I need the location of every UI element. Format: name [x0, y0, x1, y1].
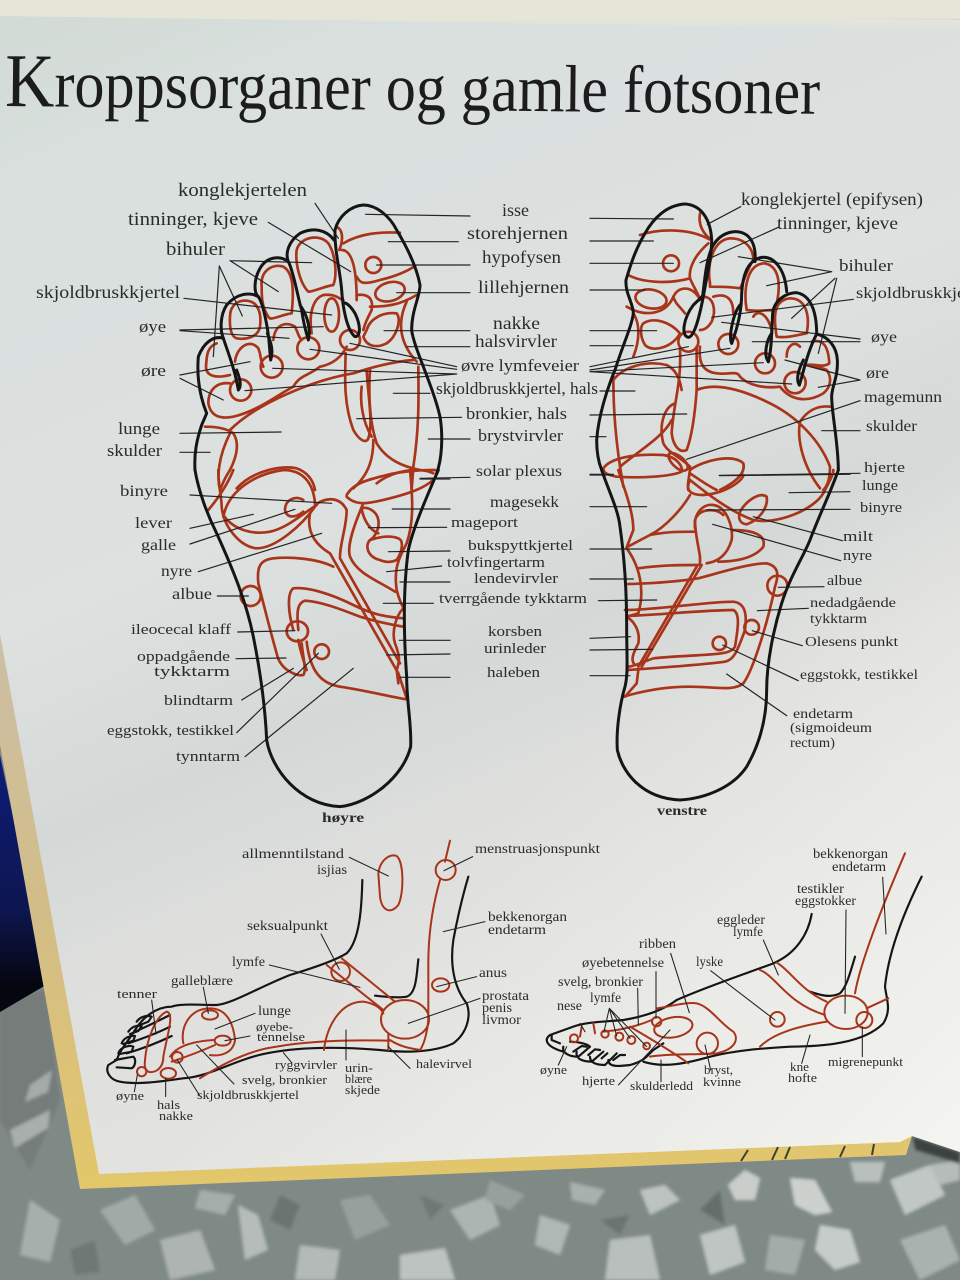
- labels: centre column: isse: [502, 200, 529, 220]
- labels: left column: binyre: [120, 483, 168, 500]
- labels: inner side of foot: tennelse: [257, 1029, 305, 1044]
- labels: centre column: solar plexus: [476, 463, 562, 480]
- labels: left column: blindtarm: [164, 693, 233, 709]
- labels: right column: øre: [866, 365, 889, 382]
- labels: right column: øye: [871, 329, 897, 346]
- labels: left column: skjoldbruskkjertel: [36, 282, 180, 302]
- labels: inner side of foot: seksualpunkt: [247, 918, 328, 933]
- labels: outer side of foot: eggleder: [717, 912, 766, 927]
- labels: right column: Olesens punkt: [805, 635, 898, 650]
- labels: left column: lever: [135, 515, 173, 532]
- labels: outer side of foot: endetarm: [832, 859, 887, 874]
- top edge strip: [0, 0, 960, 32]
- labels: centre column: [436, 200, 598, 681]
- labels: inner side of foot: nakke: [159, 1109, 193, 1123]
- labels: right column: konglekjertel (epifysen): [741, 189, 923, 210]
- labels: outer side of foot: ribben: [639, 936, 676, 951]
- labels: inner side of foot: øyebe-: [256, 1019, 293, 1034]
- right foot lower zones and outline: [190, 470, 450, 807]
- left foot lower zones and outline: [590, 470, 850, 800]
- labels: outer side of foot: eggstokker: [795, 893, 857, 908]
- labels: inner side of foot: øyne: [116, 1089, 145, 1103]
- labels: outer side of foot: [540, 846, 903, 1093]
- labels: centre column: nakke: [493, 313, 540, 333]
- labels: left column: konglekjertelen: [178, 180, 308, 201]
- outer foot zones: [650, 1003, 736, 1057]
- labels: inner side of foot: anus: [479, 965, 507, 980]
- labels: inner side of foot: skjoldbruskkjertel: [197, 1087, 299, 1102]
- labels: right column: binyre: [860, 500, 902, 516]
- labels: right column: [741, 189, 960, 751]
- labels: right column: lunge: [862, 478, 898, 494]
- left foot upper zones and outline: [590, 204, 860, 490]
- labels: right column: eggstokk, testikkel: [800, 668, 918, 683]
- labels: inner side of foot: skjede: [345, 1083, 380, 1097]
- labels: centre column: lillehjernen: [478, 277, 569, 297]
- labels: centre column: øvre lymfeveier: [461, 356, 579, 375]
- labels: right column: endetarm: [793, 707, 853, 722]
- labels: outer side of foot: bekkenorgan: [813, 846, 888, 861]
- inner foot ankle line and toes: [115, 959, 418, 1068]
- labels: right column: skulder: [866, 418, 918, 435]
- labels: outer side of foot: lymfe: [590, 990, 621, 1005]
- labels: right column: hjerte: [864, 460, 905, 476]
- labels: inner side of foot: penis: [482, 1000, 512, 1015]
- foot diagram: right foot (høyre) sole: [180, 203, 470, 807]
- labels: left column: lunge: [118, 419, 160, 438]
- labels: left column: øre: [141, 361, 166, 380]
- labels: right column: tinninger, kjeve: [777, 213, 898, 233]
- labels: outer side of foot: lymfe: [733, 924, 763, 939]
- labels: centre column: magesekk: [490, 494, 559, 511]
- labels: centre column: urinleder: [484, 641, 546, 657]
- outer foot leader lines: [558, 877, 886, 1085]
- labels: inner side of foot: lymfe: [232, 954, 265, 969]
- labels: outer side of foot: kne: [790, 1059, 809, 1074]
- labels: centre column: bronkier, hals: [466, 404, 567, 423]
- labels: outer side of foot: testikler: [797, 881, 845, 896]
- foot diagram: left foot (venstre) sole: [590, 204, 860, 800]
- labels: centre column: brystvirvler: [478, 426, 563, 445]
- labels: outer side of foot: nese: [557, 998, 582, 1013]
- labels: inner side of foot: menstruasjonspunkt: [475, 842, 600, 857]
- labels: left column: oppadgående: [137, 649, 230, 665]
- labels: outer side of foot: svelg, bronkier: [558, 974, 644, 989]
- labels: outer side of foot: bryst,: [704, 1062, 733, 1077]
- diagram: outer side of foot: [547, 853, 922, 1085]
- labels: right column: nedadgående: [810, 596, 896, 611]
- labels: inner side of foot: tenner: [117, 986, 158, 1001]
- labels: right column: nyre: [843, 548, 872, 564]
- diagram: inner side of foot: [107, 841, 485, 1097]
- labels: outer side of foot: hofte: [788, 1070, 817, 1085]
- labels: centre column: bukspyttkjertel: [468, 538, 573, 554]
- labels: left column: bihuler: [166, 239, 226, 260]
- labels: centre column: storehjernen: [467, 223, 568, 243]
- outer foot ankle line and toes: [552, 957, 855, 1066]
- labels: outer side of foot: øyebetennelse: [582, 955, 664, 970]
- inner foot zones: [378, 855, 402, 910]
- labels: left column: eggstokk, testikkel: [107, 723, 234, 739]
- outer foot outline: [547, 877, 922, 1065]
- labels: centre column: halsvirvler: [475, 331, 557, 351]
- labels: inner side of foot: endetarm: [488, 922, 547, 937]
- inner foot leader lines: [134, 857, 485, 1097]
- labels: left column: tinninger, kjeve: [128, 209, 258, 230]
- labels: inner side of foot: bekkenorgan: [488, 909, 567, 924]
- book cover edge: [0, 630, 912, 1189]
- labels: outer side of foot: hjerte: [582, 1073, 615, 1088]
- labels: left column: galle: [141, 537, 176, 554]
- labels: left column: albue: [172, 586, 212, 603]
- labels: inner side of foot: prostata: [482, 988, 529, 1003]
- inner foot outline: [107, 877, 469, 1083]
- labels: inner side of foot: livmor: [482, 1012, 522, 1027]
- labels: left column: tynntarm: [176, 749, 240, 765]
- background: terrazzo floor: [0, 640, 960, 1280]
- labels: inner side of foot: lunge: [258, 1003, 291, 1018]
- labels: right column: magemunn: [864, 389, 942, 406]
- labels: centre column: haleben: [487, 665, 541, 681]
- labels: inner side of foot: urin-: [345, 1061, 373, 1075]
- labels: left column: tykktarm: [154, 664, 230, 680]
- foot caption: høyre: høyre: [322, 810, 364, 825]
- labels: right column: (sigmoideum: [790, 721, 872, 736]
- labels: centre column: skjoldbruskkjertel, hals: [436, 379, 598, 398]
- labels: inner side of foot: halevirvel: [416, 1056, 472, 1071]
- labels: outer side of foot: migrenepunkt: [828, 1054, 903, 1069]
- background: blue object at left: [0, 755, 46, 1012]
- right foot upper zones and outline: [180, 203, 470, 490]
- labels: right column: albue: [827, 573, 862, 589]
- labels: centre column: lendevirvler: [474, 571, 558, 587]
- labels: right column: tykktarm: [810, 612, 867, 627]
- labels: outer side of foot: skulderledd: [630, 1078, 694, 1093]
- labels: centre column: tverrgående tykktarm: [439, 591, 587, 607]
- labels: left column: nyre: [161, 563, 192, 580]
- cover stripes at bottom right: [741, 1144, 874, 1161]
- labels: left column: skulder: [107, 441, 162, 460]
- labels: right column: rectum): [790, 736, 835, 751]
- labels: centre column: korsben: [488, 624, 543, 640]
- labels: inner side of foot: allmenntilstand: [242, 847, 344, 862]
- labels: left column: øye: [139, 317, 166, 336]
- labels: outer side of foot: lyske: [696, 954, 723, 969]
- labels: right column: milt: [843, 529, 874, 545]
- labels: centre column: hypofysen: [482, 247, 561, 267]
- labels: centre column: tolvfingertarm: [447, 555, 545, 571]
- labels: outer side of foot: kvinne: [703, 1074, 741, 1089]
- labels: left column: ileocecal klaff: [131, 622, 231, 638]
- labels: centre column: mageport: [451, 515, 519, 531]
- labels: inner side of foot: svelg, bronkier: [242, 1072, 328, 1087]
- labels: inner side of foot: isjias: [317, 863, 347, 878]
- labels: inner side of foot: hals: [157, 1098, 180, 1112]
- title: Kroppsorganer og gamle fotsoner: [5, 39, 821, 131]
- labels: left column: [36, 180, 308, 765]
- labels: inner side of foot: blære: [345, 1072, 372, 1086]
- labels: outer side of foot: øyne: [540, 1063, 567, 1077]
- labels: right column: bihuler: [839, 256, 893, 275]
- labels: inner side of foot: [116, 842, 600, 1123]
- foot caption: venstre: venstre: [657, 803, 707, 818]
- labels: inner side of foot: galleblære: [171, 973, 233, 988]
- labels: inner side of foot: ryggvirvler: [275, 1058, 338, 1072]
